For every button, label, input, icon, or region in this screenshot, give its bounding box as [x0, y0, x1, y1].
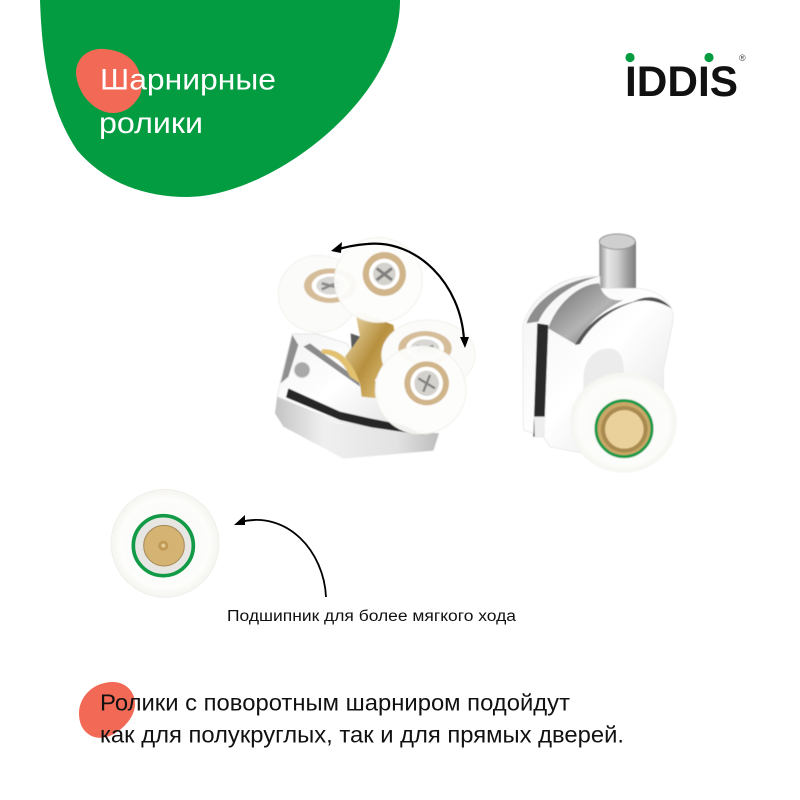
roller position 3 — [382, 320, 475, 390]
description text: как для полукруглых, так и для прямых дверей. — [100, 722, 624, 748]
roller — [570, 373, 677, 473]
arrow: rotation arc — [331, 242, 469, 348]
bearing roller front view — [111, 489, 219, 597]
logo: IDDIS: ® — [739, 53, 746, 63]
product: fixed roller on bracket — [523, 234, 677, 473]
product: swivel roller with motion positions — [275, 238, 475, 459]
bracket body — [523, 276, 673, 453]
roller position 1 — [278, 255, 358, 333]
pin — [599, 234, 636, 292]
arrow: bearing callout — [234, 515, 326, 597]
coral accent: title — [76, 49, 142, 113]
coral accent: description — [79, 682, 135, 738]
wheel recess — [583, 348, 624, 393]
brass arm — [345, 310, 397, 398]
base plate — [275, 395, 439, 459]
title — [99, 64, 276, 140]
chrome dome — [548, 283, 623, 345]
green header blob — [40, 0, 400, 197]
roller position 4 — [375, 346, 466, 434]
glass slot — [533, 323, 548, 437]
roller position 2 — [334, 238, 422, 322]
description text — [100, 690, 624, 748]
screw — [294, 362, 310, 378]
caption: bearing: Подшипник для более мягкого хода — [227, 608, 516, 625]
logo: IDDIS: IDDIS — [625, 58, 738, 106]
title: ролики — [99, 107, 203, 140]
title: Шарнирные — [100, 64, 276, 96]
chrome housing — [277, 334, 407, 432]
description text: Ролики с поворотным шарниром подойдут — [100, 690, 570, 716]
